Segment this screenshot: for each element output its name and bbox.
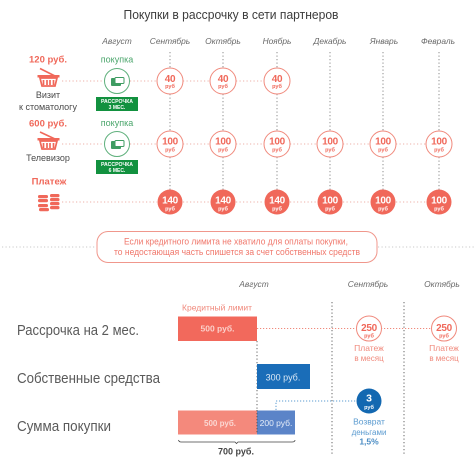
- bar: purchase sum: [178, 410, 295, 434]
- chart guide lines: [257, 302, 431, 454]
- payment October: [429, 316, 459, 363]
- callout: то недостающая часть спишется за счет собственных средств: [114, 247, 360, 257]
- month headers: bottom chart: Сентябрь: [348, 279, 388, 289]
- payment September: руб: [364, 332, 374, 340]
- payment row circles: руб: [434, 206, 444, 212]
- purchase row 2 August: green: покупка: [101, 118, 133, 128]
- purchase row 1 label: к стоматологу: [19, 102, 77, 112]
- title: Покупки в рассрочку в сети партнеров: [124, 8, 339, 22]
- payment row circles: 140: [269, 196, 286, 207]
- row label: purchase amount: Сумма покупки: [17, 419, 111, 435]
- bar: purchase sum: 500 руб.: [204, 419, 236, 428]
- purchase row 2 payments: 100: [215, 136, 232, 148]
- payment row label: [32, 176, 67, 211]
- purchase row 1 payments: 40: [272, 74, 283, 85]
- purchase row 2 payments: руб: [218, 147, 228, 154]
- purchase row 2 payments: 100: [375, 136, 392, 148]
- icon: card 1: [111, 78, 124, 86]
- cashback: 3: [366, 392, 372, 404]
- icon: basket 2: [38, 132, 60, 149]
- payment row circles: руб: [378, 206, 388, 212]
- cashback: [352, 388, 386, 446]
- purchase row 2 payments: 100: [269, 136, 286, 148]
- purchase row 2 payments: 100: [162, 136, 179, 148]
- purchase row 2 payments: [157, 131, 452, 157]
- purchase row 2 August: green: РАССРОЧКА: [101, 162, 133, 168]
- payment October: Платеж: [429, 343, 459, 353]
- purchase row 1 August: green: РАССРОЧКА: [101, 99, 133, 105]
- bar: credit limit 500: 500 руб.: [201, 324, 234, 334]
- payment September: Платеж: [354, 343, 384, 353]
- purchase row 1 payments: руб: [272, 83, 282, 90]
- month headers: bottom chart: Август: [238, 279, 269, 289]
- payment row circles: руб: [165, 206, 175, 212]
- purchase row 2 payments: руб: [434, 147, 444, 154]
- payment row circles: руб: [218, 206, 228, 212]
- purchase row 1 payments: 40: [218, 74, 229, 85]
- purchase row 1 label: [19, 54, 77, 112]
- icon: coins: [38, 194, 60, 211]
- row label: own funds: Собственные средства: [17, 371, 161, 387]
- month headers: bottom chart: Октябрь: [424, 279, 460, 289]
- purchase row 2 payments: руб: [325, 147, 335, 154]
- payment row circles: 100: [375, 196, 392, 207]
- payment September: [354, 316, 384, 363]
- month headers: top schedule: Декабрь: [313, 36, 346, 46]
- month headers: top schedule: [101, 36, 455, 46]
- month headers: top schedule: Август: [101, 36, 132, 46]
- purchase row 1 label: Визит: [36, 90, 60, 100]
- payment September: в месяц: [354, 354, 384, 363]
- purchase row 1 August: green: [96, 54, 138, 111]
- purchase row 1 August: green: покупка: [101, 54, 133, 64]
- payment row circles: [158, 190, 452, 214]
- grid: dotted guide lines: [62, 52, 439, 202]
- purchase row 2 payments: руб: [378, 147, 388, 154]
- cashback: деньгами: [352, 428, 386, 437]
- month headers: top schedule: Январь: [369, 36, 398, 46]
- purchase row 1 payments: [157, 68, 290, 94]
- payment September: 250: [361, 323, 378, 334]
- icon: card 2: [111, 140, 124, 149]
- purchase row 2 label: [26, 118, 70, 163]
- callout: [2, 232, 474, 262]
- month headers: top schedule: Ноябрь: [263, 36, 291, 46]
- bar: own funds 300: 300 руб.: [266, 372, 300, 382]
- bracket: total: 700 руб.: [218, 446, 254, 456]
- purchase row 2 label: Телевизор: [26, 153, 70, 163]
- purchase row 2 payments: руб: [165, 147, 175, 154]
- payment October: руб: [439, 332, 449, 340]
- credit limit label: Кредитный лимит: [182, 302, 252, 312]
- payment October: в месяц: [429, 354, 459, 363]
- cashback: Возврат: [353, 416, 385, 426]
- month headers: top schedule: Октябрь: [205, 36, 241, 46]
- icon: basket 1: [38, 68, 60, 86]
- payment row circles: 100: [431, 196, 448, 207]
- payment row circles: 140: [215, 196, 232, 207]
- purchase row 2 payments: 100: [431, 136, 448, 148]
- purchase row 1 label: 120 руб.: [29, 54, 67, 66]
- row label: installment: Рассрочка на 2 мес.: [17, 323, 139, 339]
- purchase row 1 payments: 40: [165, 74, 176, 85]
- payment row circles: руб: [325, 206, 335, 212]
- purchase row 2 payments: руб: [272, 147, 282, 154]
- cashback: руб: [364, 404, 374, 411]
- month headers: top schedule: Сентябрь: [150, 36, 190, 46]
- payment row circles: 140: [162, 196, 179, 207]
- purchase row 1 payments: руб: [165, 83, 175, 90]
- purchase row 1 August: green: 3 МЕС.: [109, 105, 126, 111]
- cashback: 1,5%: [359, 436, 379, 446]
- callout: Если кредитного лимита не хватило для оплаты покупки,: [124, 236, 348, 246]
- payment row circles: руб: [272, 206, 282, 212]
- purchase row 2 August: green: 6 МЕС.: [109, 168, 126, 174]
- bar: purchase sum: 200 руб.: [260, 418, 292, 428]
- bracket: total: [178, 440, 295, 456]
- payment October: 250: [436, 323, 453, 334]
- payment row label: Платеж: [32, 176, 67, 188]
- purchase row 2 payments: 100: [322, 136, 339, 148]
- bar: own funds 300: [257, 364, 310, 389]
- month headers: top schedule: Февраль: [421, 36, 455, 46]
- payment row circles: 100: [322, 196, 339, 207]
- purchase row 2 label: 600 руб.: [29, 118, 67, 130]
- purchase row 1 payments: руб: [218, 83, 228, 90]
- bar: credit limit 500: [178, 316, 257, 341]
- month headers: bottom chart: [238, 279, 460, 289]
- purchase row 2 August: green: [96, 118, 138, 174]
